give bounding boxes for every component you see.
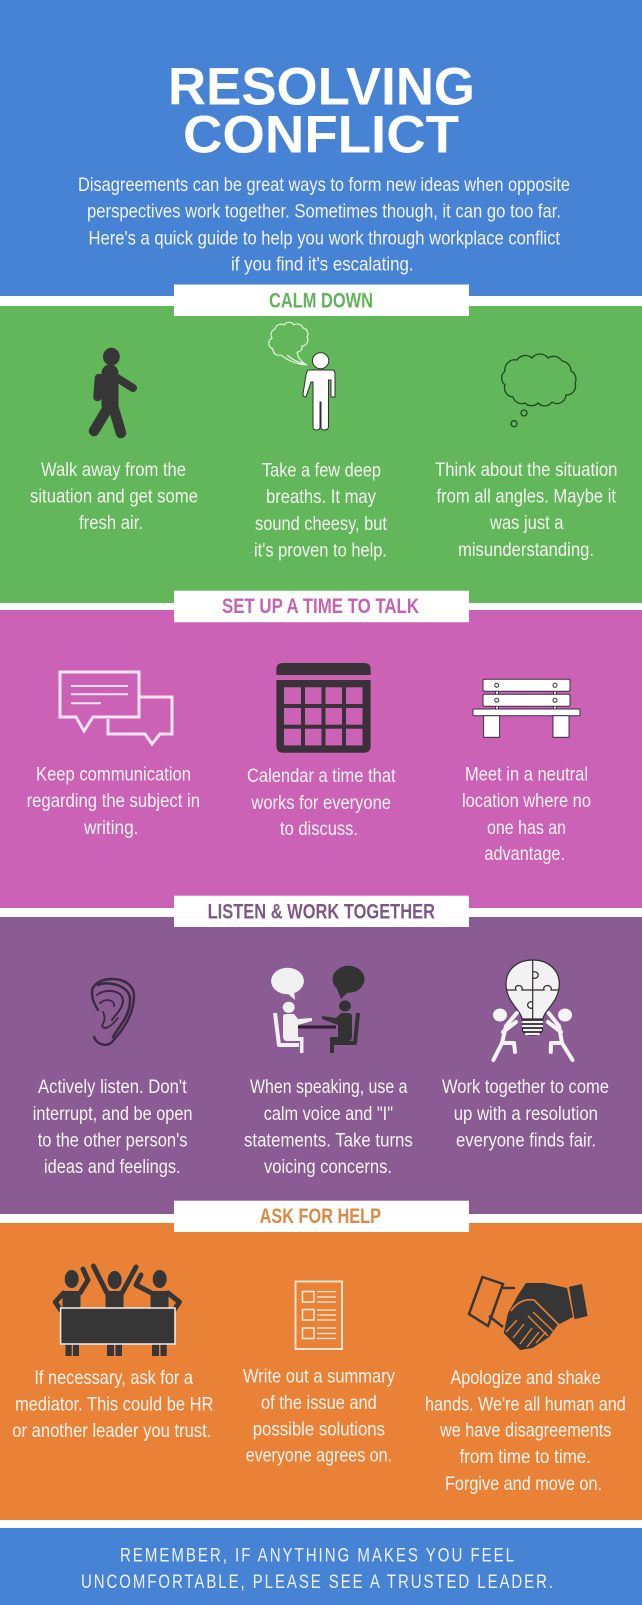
text: keep communication: Keep communication [36, 764, 191, 786]
icon: handshake [469, 1277, 588, 1350]
text: calendar a time: to discuss. [280, 818, 358, 840]
text: apologize: Apologize and shake [450, 1367, 601, 1389]
icon: checklist [296, 1282, 342, 1349]
text: when speaking: When speaking, use a [250, 1076, 408, 1098]
footer message: REMEMBER, IF ANYTHING MAKES YOU FEEL [120, 1546, 516, 1567]
text: walk away [30, 459, 198, 534]
text: when speaking: calm voice and "I" [264, 1103, 393, 1125]
text: write a summary: of the issue and [261, 1392, 377, 1414]
text: think about: from all angles. Maybe it [436, 486, 616, 508]
text: mediator [12, 1367, 213, 1442]
icon: puzzle light bulb with two figures [493, 960, 572, 1060]
text: apologize [425, 1367, 626, 1495]
text: apologize: from time to time. [460, 1446, 591, 1468]
icon: chat bubbles [60, 672, 172, 744]
text: actively listen: ideas and feelings. [44, 1156, 181, 1178]
text: think about [435, 459, 618, 561]
text: actively listen: Actively listen. Don't [38, 1076, 187, 1098]
text: deep breaths [254, 460, 387, 562]
text: neutral location: Meet in a neutral [465, 764, 588, 786]
heading: set up a time to talk [174, 591, 469, 622]
heading: ask for help: ASK FOR HELP [260, 1205, 381, 1228]
text: write a summary: possible solutions [253, 1419, 385, 1441]
panel: calm down [0, 284, 642, 603]
text: neutral location: one has an [487, 817, 566, 839]
text: think about: Think about the situation [435, 459, 618, 481]
icon: two people talking [271, 966, 364, 1053]
title: CONFLICT [183, 106, 459, 164]
icon: thought cloud [502, 354, 576, 427]
text: keep communication [27, 764, 200, 839]
heading: set up a time to talk: SET UP A TIME TO TALK [222, 595, 419, 618]
icon: bench [473, 679, 580, 737]
panel: listen and work together [0, 896, 642, 1214]
text: when speaking: voicing concerns. [264, 1156, 392, 1178]
text: keep communication: regarding the subject in [27, 790, 200, 812]
heading: calm down: CALM DOWN [269, 290, 373, 313]
text: apologize: Forgive and move on. [445, 1473, 602, 1495]
text: when speaking [244, 1076, 413, 1178]
text: deep breaths: Take a few deep [262, 460, 381, 482]
text: neutral location [462, 764, 591, 865]
text: work together: everyone finds fair. [456, 1130, 596, 1152]
text: mediator: mediator. This could be HR [15, 1394, 213, 1416]
footer message [81, 1546, 555, 1593]
text: deep breaths: breaths. It may [266, 486, 376, 508]
heading: listen and work together: LISTEN & WORK TOGETHER [208, 900, 435, 924]
text: work together: Work together to come [442, 1076, 609, 1098]
text: write a summary [243, 1366, 395, 1467]
text: when speaking: statements. Take turns [244, 1130, 413, 1152]
text: neutral location: advantage. [484, 843, 565, 865]
text: walk away: Walk away from the [41, 459, 186, 481]
heading: ask for help [174, 1201, 469, 1232]
text: work together [442, 1076, 609, 1152]
heading: calm down [174, 284, 469, 316]
text: write a summary: everyone agrees on. [246, 1445, 392, 1467]
text: think about: misunderstanding. [458, 539, 594, 561]
text: deep breaths: sound cheesy, but [255, 513, 387, 535]
text: actively listen: interrupt, and be open [33, 1103, 192, 1125]
text: walk away: situation and get some [30, 486, 198, 508]
panel: footer [0, 1528, 642, 1605]
icon: walking person [94, 348, 133, 433]
text: mediator: If necessary, ask for a [34, 1367, 193, 1389]
text: think about: was just a [489, 512, 564, 534]
text: keep communication: writing. [83, 817, 138, 839]
heading: listen and work together [174, 896, 469, 927]
text: walk away: fresh air. [79, 512, 143, 534]
text: actively listen: to the other person's [38, 1130, 188, 1152]
text: actively listen [33, 1076, 192, 1178]
intro text: perspectives work together. Sometimes though, it can go too far. [87, 201, 561, 223]
panel: ask for help [0, 1201, 642, 1520]
intro text: Here's a quick guide to help you work through workplace conflict [88, 227, 560, 249]
text: deep breaths: it's proven to help. [254, 540, 387, 562]
panel: header [0, 0, 642, 296]
text: calendar a time: works for everyone [251, 792, 391, 814]
icon: person breathing [269, 322, 335, 430]
text: calendar a time: Calendar a time that [247, 765, 396, 787]
text: calendar a time [247, 765, 396, 840]
panel: set up a time to talk [0, 591, 642, 908]
intro text [78, 174, 570, 276]
title [168, 58, 475, 164]
text: work together: up with a resolution [454, 1103, 598, 1125]
text: neutral location: location where no [462, 790, 591, 812]
icon: group holding banner [55, 1266, 179, 1356]
intro text: if you find it's escalating. [231, 254, 414, 276]
text: apologize: we have disagreements [439, 1420, 612, 1442]
title: RESOLVING [168, 58, 475, 116]
text: write a summary: Write out a summary [243, 1366, 395, 1388]
text: mediator: or another leader you trust. [12, 1420, 211, 1442]
icon: ear [92, 979, 134, 1045]
icon: calendar [276, 663, 371, 753]
